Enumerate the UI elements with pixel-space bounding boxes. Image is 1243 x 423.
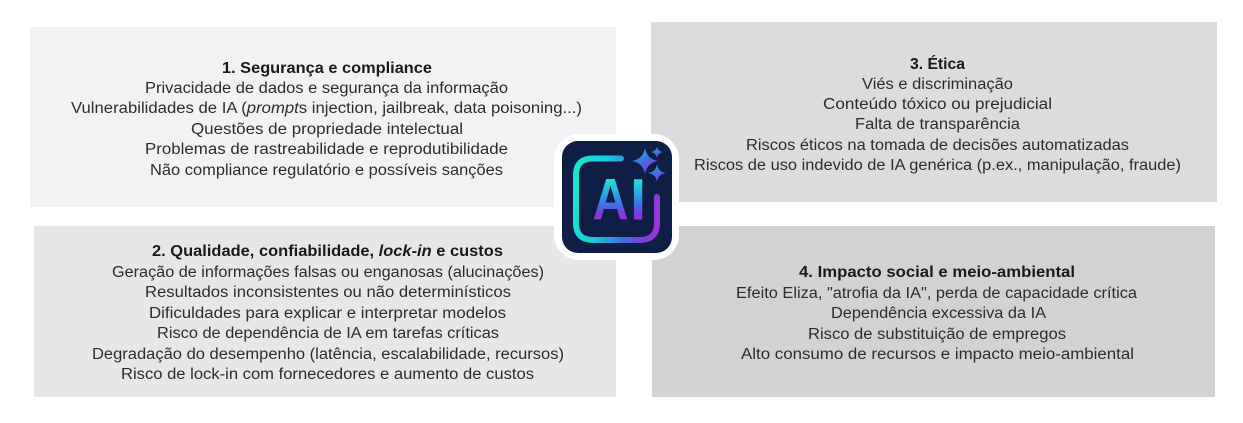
list: social and environmental risks: Alto consumo de recursos e impacto meio-ambiental [741, 346, 1134, 363]
icon: gradient frame [576, 158, 657, 240]
icon: sparkles [632, 147, 666, 182]
list: quality risks [92, 264, 564, 383]
list: quality risks: Resultados inconsistentes ou não determinísticos [145, 284, 511, 301]
icon label: AI: I [630, 168, 646, 232]
list: ethics risks: Viés e discriminação [862, 76, 1013, 93]
list: ethics risks: Riscos éticos na tomada de decisões automatizadas [746, 137, 1129, 154]
list: social and environmental risks: Dependência excessiva da IA [831, 305, 1047, 322]
list: social and environmental risks: Efeito Eliza, "atrofia da IA", perda de capacidade crítica [736, 285, 1137, 302]
heading: Ética: 3. Ética [910, 56, 965, 73]
list: social and environmental risks [736, 285, 1137, 363]
list: ethics risks: Riscos de uso indevido de IA genérica (p.ex., manipulação, fraude) [694, 157, 1181, 174]
panel: 1. Segurança e compliance [30, 27, 616, 207]
list: security risks: Questões de propriedade intelectual [191, 121, 463, 138]
icon: AI badge [554, 134, 679, 260]
list: ethics risks: Falta de transparência [855, 116, 1020, 133]
heading: Qualidade, confiabilidade, lock-in e custos: 2. Qualidade, confiabilidade, lock-in e custos [152, 243, 503, 260]
panel: 3. Ética [651, 22, 1217, 202]
icon label: AI: A [592, 168, 628, 232]
list: ethics risks: Conteúdo tóxico ou prejudicial [823, 96, 1052, 113]
list: quality risks: Risco de dependência de IA em tarefas críticas [157, 325, 499, 342]
heading: Segurança e compliance: 1. Segurança e compliance [222, 60, 432, 77]
list: social and environmental risks: Risco de substituição de empregos [808, 326, 1066, 343]
list: quality risks: Geração de informações falsas ou enganosas (alucinações) [112, 264, 544, 281]
list: quality risks: Dificuldades para explicar e interpretar modelos [149, 305, 506, 322]
list: security risks: Problemas de rastreabilidade e reprodutibilidade [145, 141, 508, 158]
panel: 2. Qualidade, confiabilidade, lock-in e custos [34, 226, 616, 397]
list: ethics risks [694, 76, 1181, 174]
list: security risks [71, 80, 582, 179]
panel: 4. Impacto social e meio-ambiental [652, 226, 1215, 397]
list: security risks: Não compliance regulatório e possíveis sanções [150, 162, 503, 179]
list: security risks: Vulnerabilidades de IA ( prompts injection, jailbreak, data poisoning...) [71, 100, 582, 117]
list: quality risks: Risco de lock-in com fornecedores e aumento de custos [121, 366, 534, 383]
list: security risks: Privacidade de dados e segurança da informação [145, 80, 508, 97]
list: quality risks: Degradação do desempenho (latência, escalabilidade, recursos) [92, 346, 564, 363]
heading: Impacto social e meio-ambiental: 4. Impacto social e meio-ambiental [799, 264, 1075, 281]
